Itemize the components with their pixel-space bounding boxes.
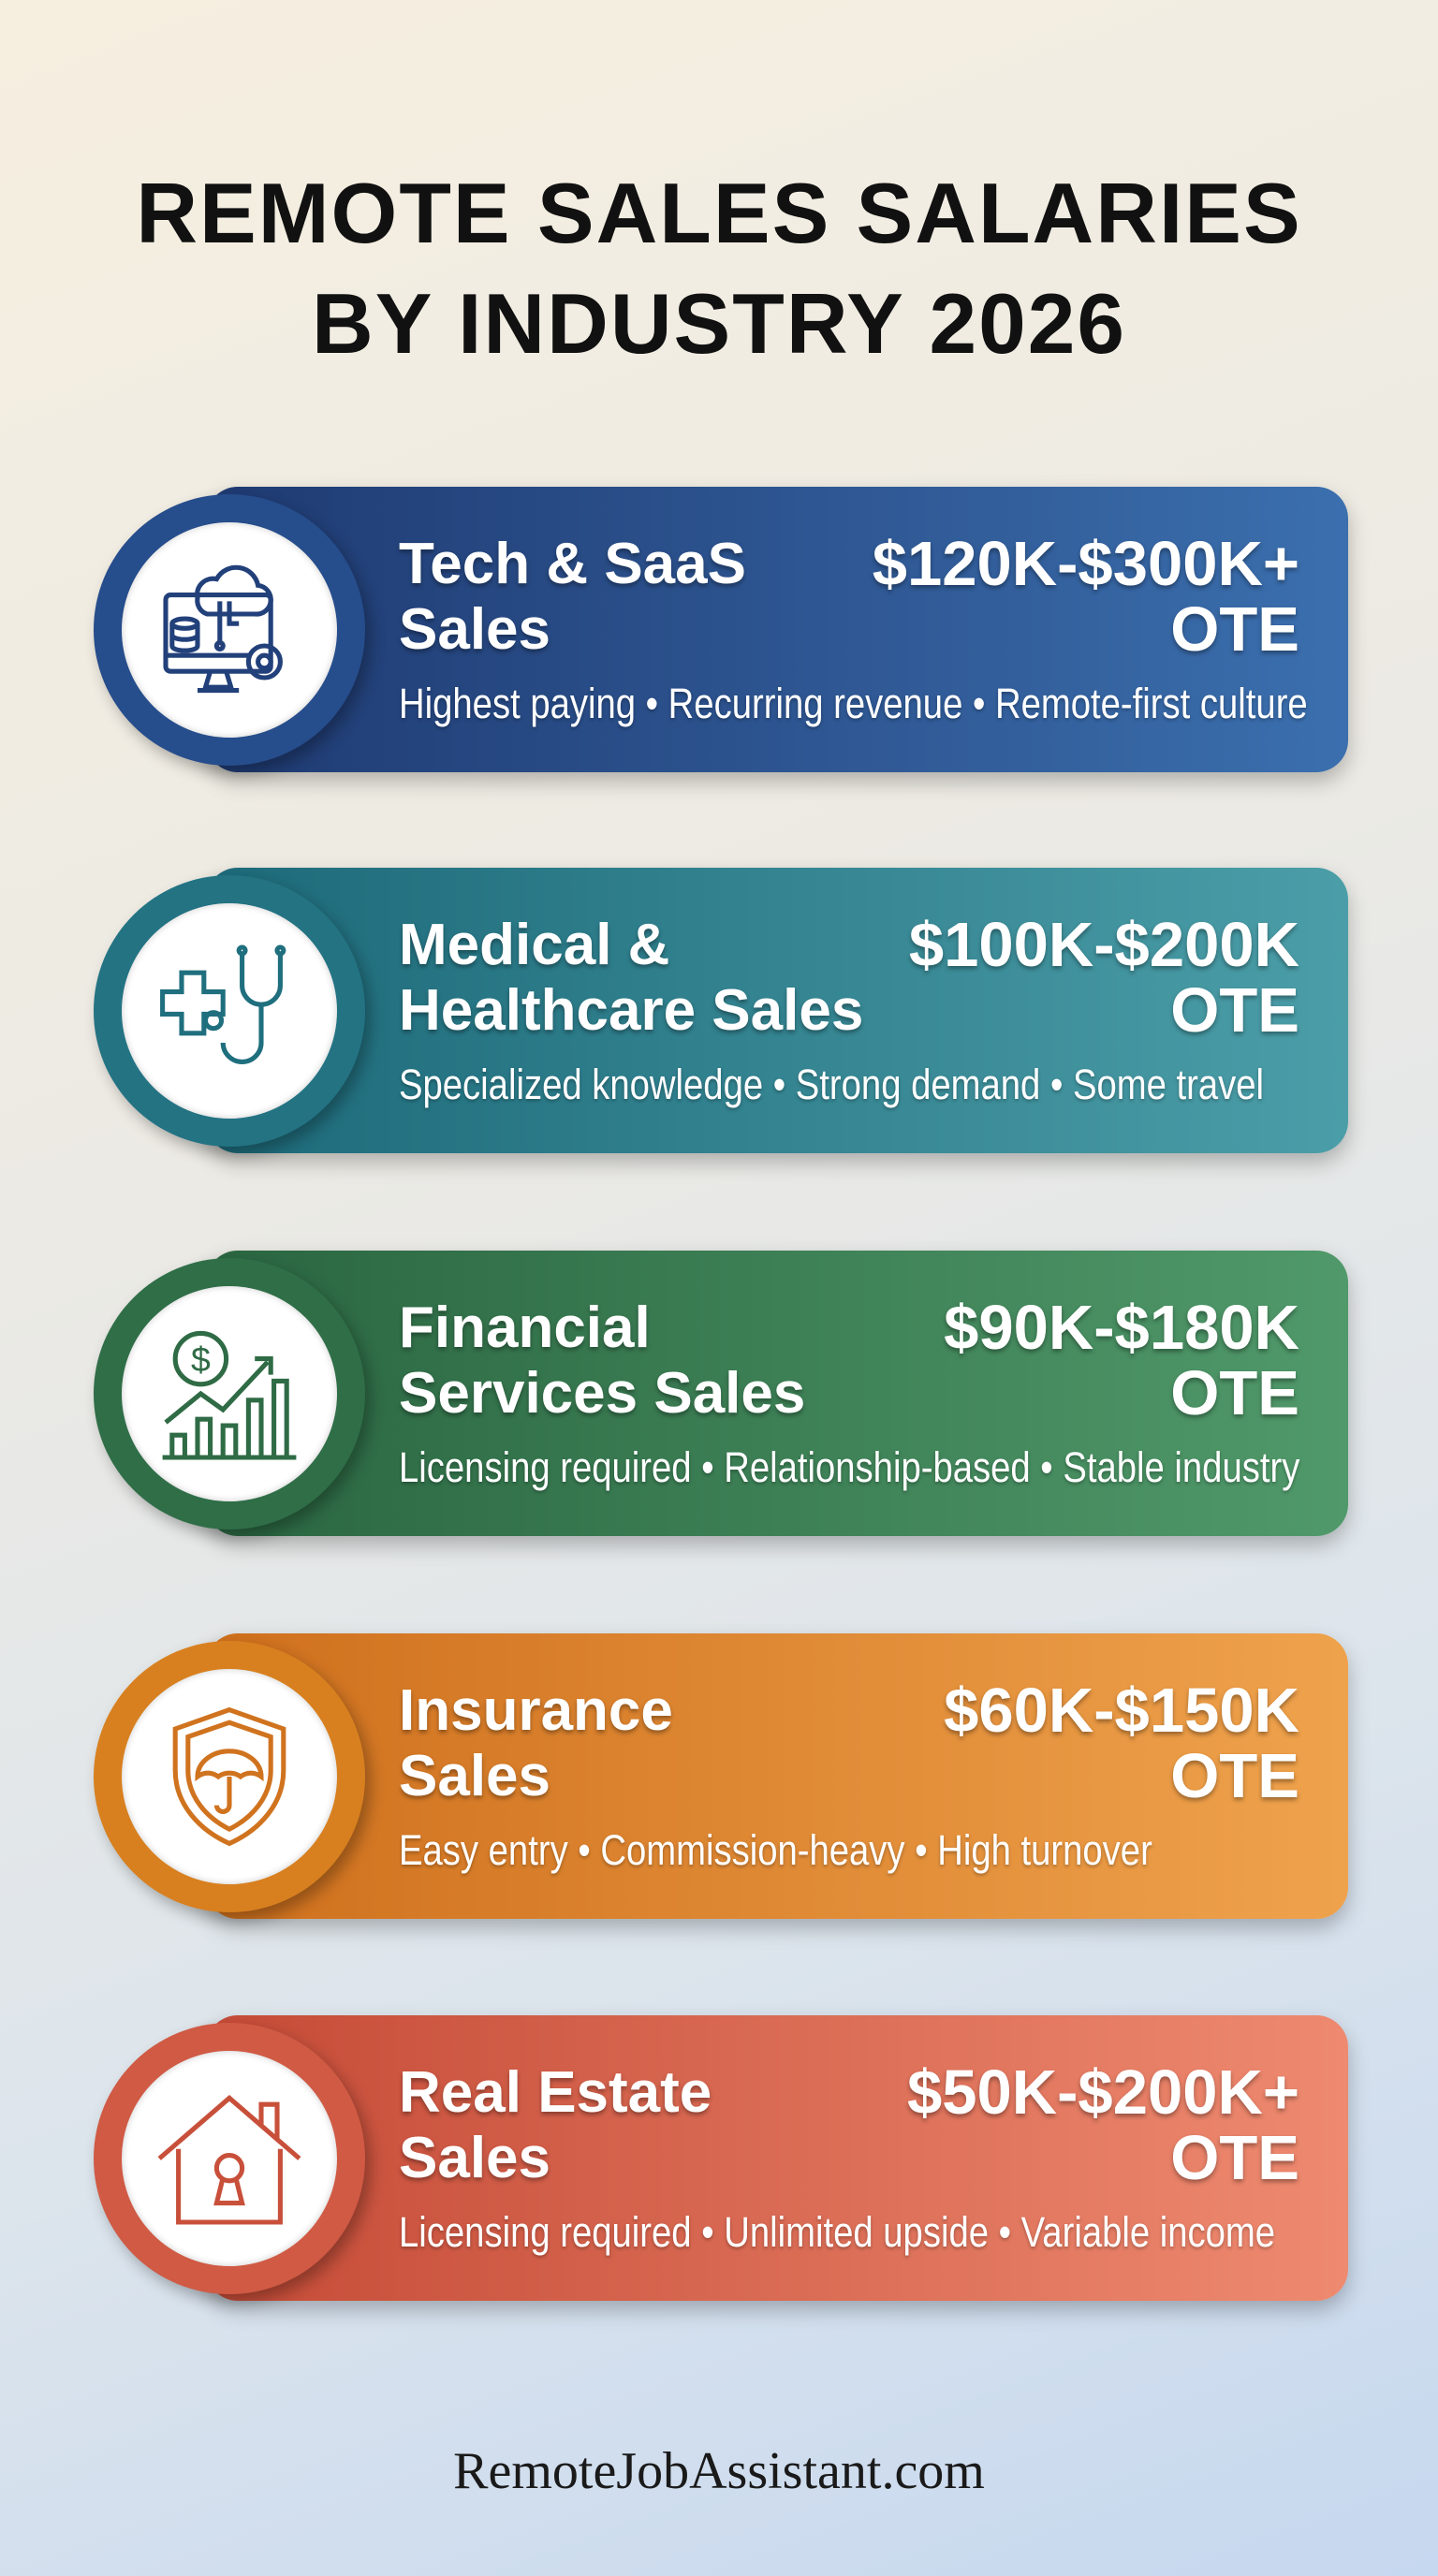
heading: Financial bbox=[399, 1295, 651, 1360]
salary: $60K-$150K bbox=[944, 1676, 1299, 1746]
icon: computer cloud gear bbox=[122, 522, 337, 738]
heading: Services Sales bbox=[399, 1361, 805, 1426]
salary: OTE bbox=[1170, 975, 1299, 1046]
heading: Sales bbox=[399, 2126, 550, 2190]
icon: shield umbrella bbox=[122, 1669, 337, 1884]
heading bbox=[399, 1295, 805, 1426]
panel: medical bbox=[90, 867, 1359, 1174]
heading bbox=[398, 532, 746, 662]
heading: Healthcare Sales bbox=[399, 978, 863, 1043]
salary bbox=[944, 1293, 1299, 1428]
title bbox=[136, 167, 1302, 372]
heading: Sales bbox=[399, 597, 550, 662]
text block: Specialized knowledge • Strong demand • Some travel bbox=[399, 1061, 1264, 1108]
salary: $50K-$200K+ bbox=[907, 2057, 1299, 2128]
heading bbox=[399, 2060, 712, 2190]
icon: dollar chart bbox=[122, 1286, 337, 1501]
text block: Licensing required • Unlimited upside • Variable income bbox=[399, 2208, 1275, 2256]
text block: Highest paying • Recurring revenue • Remote-first culture bbox=[399, 680, 1308, 727]
salary: $90K-$180K bbox=[944, 1293, 1299, 1363]
salary bbox=[943, 1676, 1299, 1811]
panel: tech & saas bbox=[90, 485, 1359, 792]
panel: real estate bbox=[90, 2014, 1359, 2321]
text block: Licensing required • Relationship-based • Stable industry bbox=[399, 1443, 1299, 1491]
salary: $100K-$200K bbox=[909, 910, 1299, 980]
icon: dollar chart: $ bbox=[191, 1339, 211, 1379]
text block: Easy entry • Commission-heavy • High turnover bbox=[399, 1826, 1152, 1874]
icon: medical cross stethoscope bbox=[122, 903, 337, 1119]
footer: RemoteJobAssistant.com bbox=[453, 2442, 985, 2500]
salary: OTE bbox=[1170, 1358, 1299, 1428]
salary bbox=[908, 910, 1299, 1046]
panel: insurance bbox=[90, 1632, 1359, 1939]
heading: Insurance bbox=[399, 1678, 673, 1743]
salary: $120K-$300K+ bbox=[873, 529, 1299, 599]
heading bbox=[399, 913, 863, 1043]
panel: financial bbox=[90, 1249, 1359, 1556]
salary: OTE bbox=[1170, 1741, 1299, 1811]
salary bbox=[873, 529, 1299, 665]
title: REMOTE SALES SALARIES bbox=[136, 167, 1302, 261]
salary: OTE bbox=[1170, 2123, 1299, 2193]
heading bbox=[399, 1678, 673, 1808]
heading: Sales bbox=[399, 1744, 550, 1808]
salary: OTE bbox=[1170, 594, 1299, 665]
heading: Tech & SaaS bbox=[399, 532, 746, 596]
heading: Medical & bbox=[399, 913, 669, 977]
salary bbox=[906, 2057, 1299, 2193]
title: BY INDUSTRY 2026 bbox=[312, 277, 1126, 372]
icon: house keyhole bbox=[122, 2051, 337, 2266]
heading: Real Estate bbox=[399, 2060, 712, 2125]
